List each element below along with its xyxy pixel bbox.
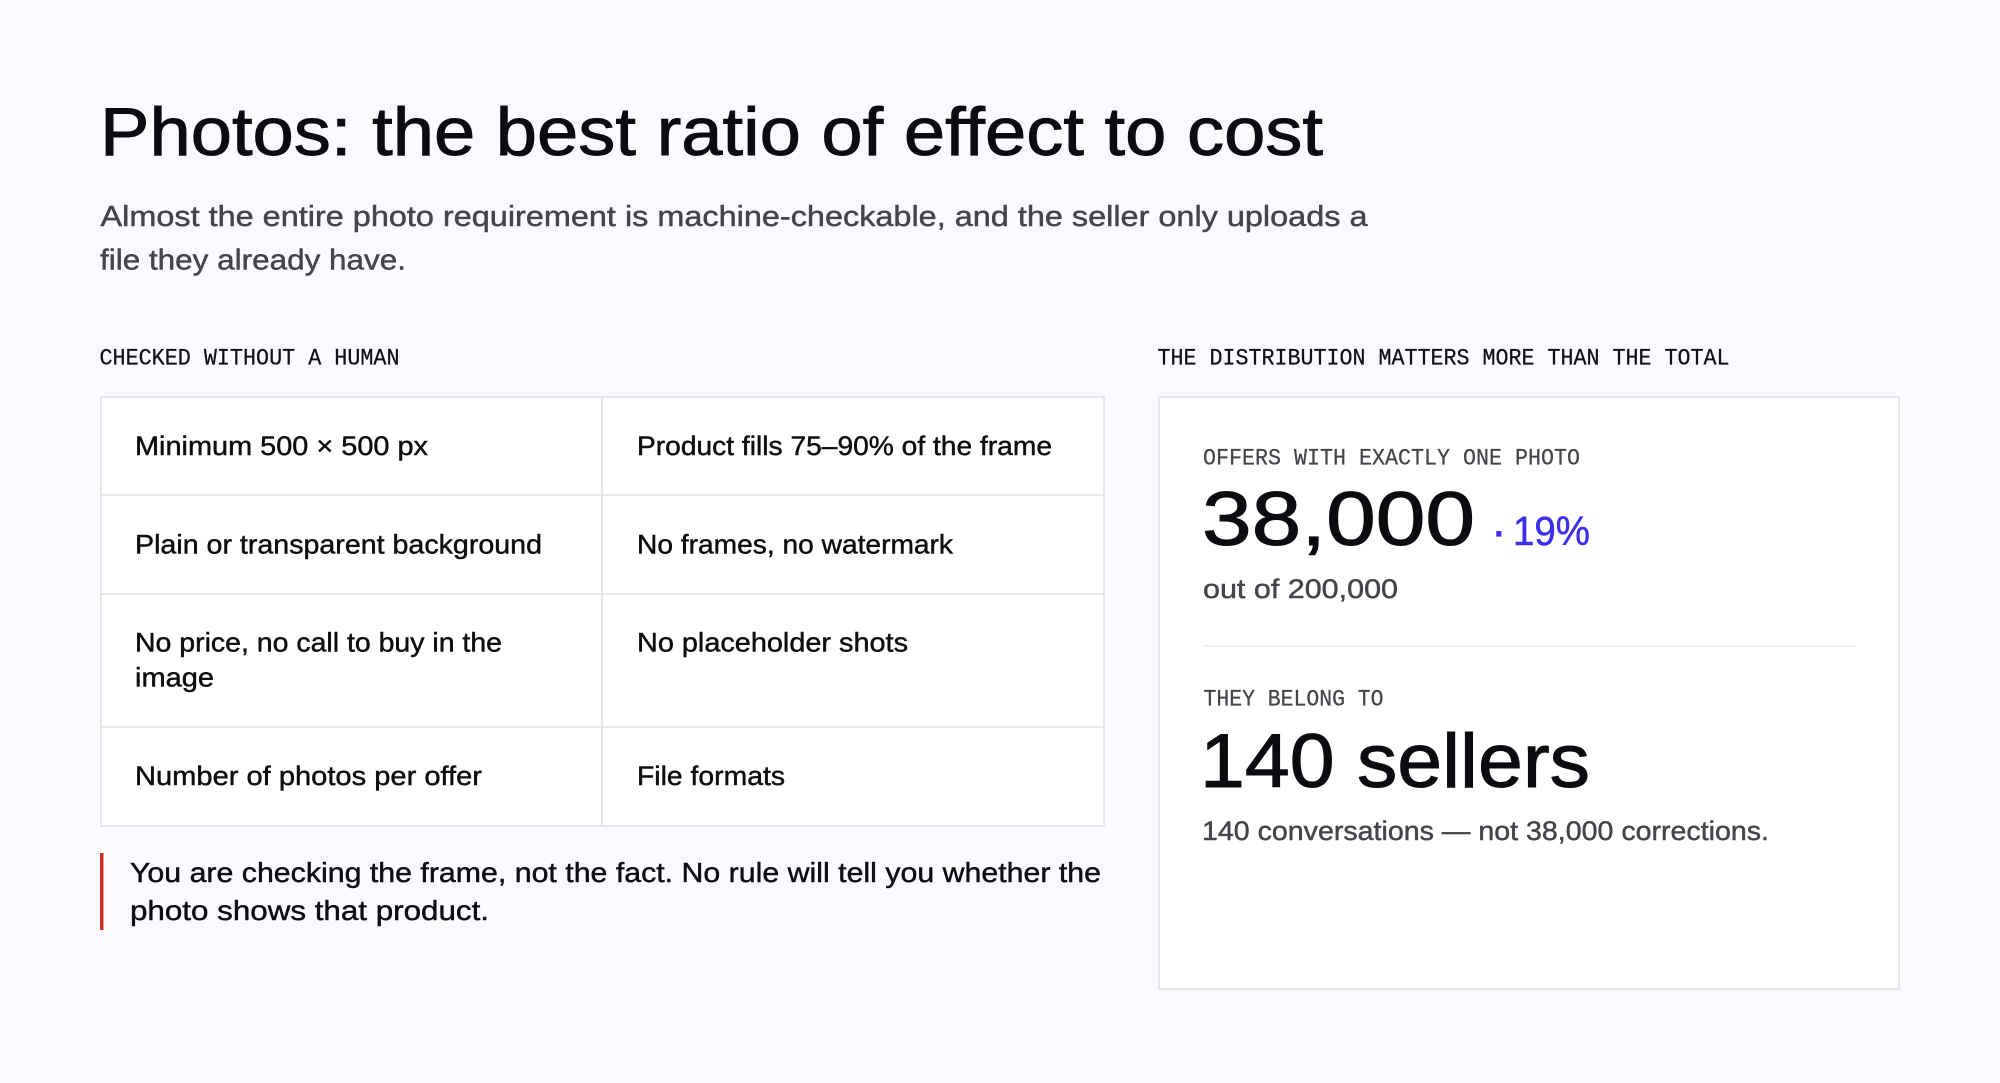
requirements table: No placeholder shots	[637, 628, 908, 658]
subtitle: Almost the entire photo requirement is machine-checkable, and the seller only uploads a	[100, 201, 1368, 233]
heading: the distribution matters: THE DISTRIBUTION MATTERS MORE THAN THE TOTAL	[1158, 346, 1730, 372]
requirements table: image	[135, 662, 214, 692]
panel: the distribution matters more than the total	[1158, 346, 1899, 989]
stat: offers with exactly one photo: ·	[1492, 508, 1506, 554]
requirements table: No price, no call to buy in the	[135, 628, 502, 658]
stat: offers with exactly one photo: 19%	[1513, 508, 1590, 554]
stat: they belong to 140 sellers: THEY BELONG TO	[1204, 686, 1384, 712]
requirements table: Minimum 500 × 500 px	[135, 431, 429, 461]
requirements table: Number of photos per offer	[135, 761, 482, 791]
subtitle	[100, 201, 1368, 276]
callout: checking the frame, not the fact	[100, 853, 1101, 930]
stat: offers with exactly one photo: OFFERS WITH EXACTLY ONE PHOTO	[1203, 446, 1580, 472]
title: Photos: the best ratio of effect to cost	[100, 94, 1323, 170]
panel: checked without a human	[100, 346, 1104, 930]
distribution card	[1159, 397, 1899, 989]
heading: checked without a human: CHECKED WITHOUT A HUMAN	[100, 346, 400, 372]
subtitle: file they already have.	[100, 244, 406, 276]
requirements table: No frames, no watermark	[637, 530, 954, 560]
stat: offers with exactly one photo	[1202, 446, 1590, 604]
requirements table	[101, 397, 1104, 826]
requirements table: File formats	[637, 761, 785, 791]
callout: checking the frame, not the fact: photo shows that product.	[130, 895, 489, 926]
stat: offers with exactly one photo: 38,000	[1202, 477, 1475, 562]
requirements table: Product fills 75–90% of the frame	[637, 431, 1052, 461]
stat: offers with exactly one photo: out of 200,000	[1203, 574, 1398, 604]
requirements table: Plain or transparent background	[135, 530, 542, 560]
stat: they belong to 140 sellers: 140 conversations — not 38,000 corrections.	[1202, 816, 1769, 846]
stat: they belong to 140 sellers: 140 sellers	[1200, 719, 1590, 804]
stat: they belong to 140 sellers	[1200, 686, 1769, 846]
callout: checking the frame, not the fact: You are checking the frame, not the fact. No rule will tell you whether the	[130, 857, 1101, 888]
